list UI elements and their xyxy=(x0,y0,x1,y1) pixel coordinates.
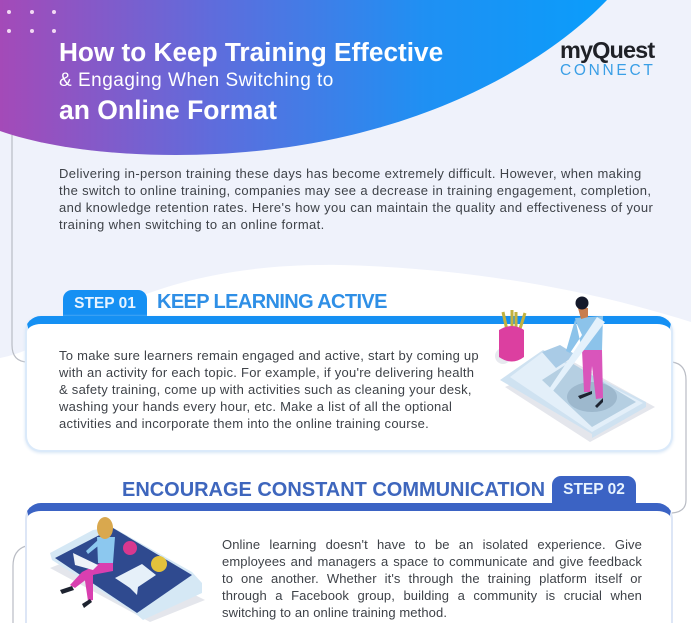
pencil cup xyxy=(495,310,525,364)
step 02 text: employees and managers a space to communicate and give feedback xyxy=(222,554,642,569)
intro text: the switch to online training, companies may see a decrease in training engagement, completion, xyxy=(59,183,651,198)
step 01 text: & safety training, come up with activities such as cleaning your desk, xyxy=(59,382,472,397)
man xyxy=(549,296,605,408)
step 01 tab xyxy=(63,290,147,318)
step 01 tab: STEP 01 xyxy=(74,295,136,312)
logo: myQuest xyxy=(560,37,654,63)
step 02 heading: ENCOURAGE CONSTANT COMMUNICATION xyxy=(122,479,545,501)
woman xyxy=(60,517,115,608)
icon: man on document with pencil cup xyxy=(495,296,654,442)
logo xyxy=(560,37,656,79)
logo: CONNECT xyxy=(560,62,656,79)
panel: step 01 xyxy=(24,290,674,454)
step 02 tab xyxy=(552,476,636,504)
intro text: Delivering in-person training these days has become extremely difficult. However, when making xyxy=(59,166,642,181)
step 01 heading: KEEP LEARNING ACTIVE xyxy=(157,291,387,313)
step 02 text: through a Facebook group, building a community is crucial when xyxy=(222,588,642,603)
step 02 text: to one another. Whether it's through the training platform itself or xyxy=(222,571,642,586)
intro text: and knowledge retention rates. Here's how you can maintain the quality and effectiveness of your xyxy=(59,200,653,215)
title: How to Keep Training Effective xyxy=(59,37,443,67)
step 02 text: switching to an online training method. xyxy=(222,605,447,620)
icon: woman on smartphone xyxy=(50,517,204,622)
intro text xyxy=(59,166,653,232)
panel: step 02 xyxy=(25,476,673,623)
step 02 tab: STEP 02 xyxy=(563,481,625,498)
title: & Engaging When Switching to xyxy=(59,70,334,91)
step 02 text xyxy=(222,537,642,620)
step 01 text: activities and incorporate them into the online training course. xyxy=(59,416,429,431)
step 02 text: Online learning doesn't have to be an isolated experience. Give xyxy=(222,537,642,552)
step 01 text xyxy=(59,348,479,431)
step 02 card xyxy=(25,503,673,623)
title: an Online Format xyxy=(59,95,277,125)
step 01 card xyxy=(25,316,673,452)
step 01 text: with an activity for each topic. For example, if you're delivering health xyxy=(59,365,474,380)
intro text: training when switching to an online format. xyxy=(59,217,325,232)
title xyxy=(59,37,443,125)
decorative dots xyxy=(7,10,56,33)
step 01 text: washing your hands every hour, etc. Make a list of all the optional xyxy=(59,399,452,414)
step 01 text: To make sure learners remain engaged and active, start by coming up xyxy=(59,348,479,363)
